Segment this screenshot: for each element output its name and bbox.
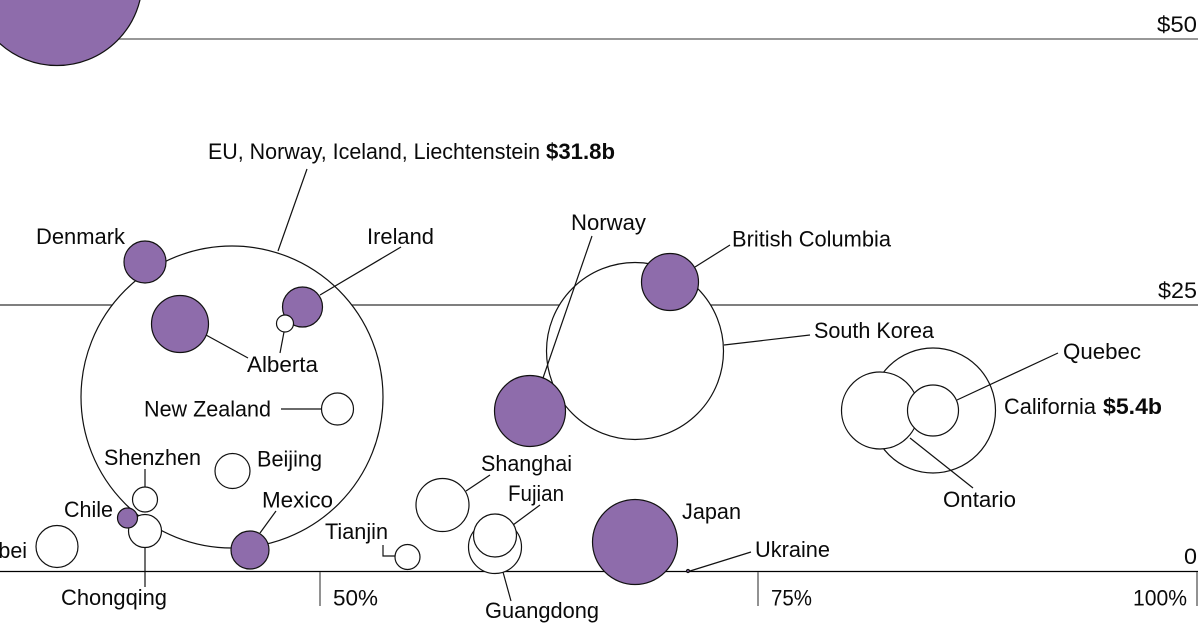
bubble: EU, Norway, Iceland, Liechtenstein	[81, 139, 615, 548]
bubble: Tianjin: Tianjin	[325, 519, 388, 544]
bubble: Tianjin	[325, 519, 420, 570]
bubble: British Columbia	[642, 226, 892, 310]
bubble: Ontario: Ontario	[943, 487, 1016, 512]
bubble: California	[870, 348, 1162, 473]
bubble: Chongqing	[61, 514, 167, 610]
bubble: California: $5.4b	[1103, 394, 1162, 419]
bubble: Mexico: Mexico	[262, 488, 333, 512]
bubble: large unlabeled purple	[0, 0, 142, 66]
bubble: Beijing	[215, 446, 322, 488]
bubble: Shenzhen	[104, 445, 201, 512]
bubble: Ireland	[282, 224, 434, 327]
bubble: Shanghai: Shanghai	[481, 451, 572, 476]
bubble: EU, Norway, Iceland, Liechtenstein: $31.8b	[546, 139, 615, 164]
bubble: Hubei	[0, 526, 78, 568]
bubble: Quebec	[908, 339, 1141, 436]
bubble: Chile	[64, 497, 138, 528]
bubble: Quebec: Quebec	[1063, 339, 1141, 364]
bubble: Chile: Chile	[64, 497, 113, 522]
bubble: Ukraine	[686, 537, 830, 572]
y axis label: $25: $25	[1158, 278, 1197, 303]
bubble: British Columbia: British Columbia	[732, 226, 892, 252]
bubble: Japan: Japan	[682, 499, 741, 524]
x axis tick: 75%	[758, 572, 812, 610]
x axis tick: 50%: 50%	[333, 586, 378, 610]
bubble: California: California	[1004, 394, 1097, 419]
bubble: Fujian	[474, 481, 564, 557]
bubble: Ukraine: Ukraine	[755, 537, 830, 562]
bubble: Denmark	[36, 224, 166, 283]
bubble: New Zealand: New Zealand	[144, 396, 271, 422]
bubble: Shanghai	[416, 451, 572, 532]
bubble: Beijing: Beijing	[257, 446, 322, 472]
bubble: Ontario	[842, 372, 1016, 512]
bubble: unlabeled purple with leader	[152, 296, 248, 358]
bubble: Alberta	[247, 315, 319, 377]
bubble: Japan	[592, 499, 741, 584]
bubble: Norway: Norway	[571, 210, 646, 235]
bubble: Guangdong	[468, 520, 599, 623]
bubble: Mexico	[231, 488, 333, 569]
y axis label: 0: 0	[1184, 544, 1197, 569]
bubble: Fujian: Fujian	[508, 481, 564, 506]
x axis tick: 50%	[320, 572, 378, 610]
bubble: EU, Norway, Iceland, Liechtenstein: EU, Norway, Iceland, Liechtenstein	[208, 139, 540, 164]
x axis tick: 75%: 75%	[771, 586, 812, 610]
bubble: Shenzhen: Shenzhen	[104, 445, 201, 470]
bubble: Alberta: Alberta	[247, 352, 319, 377]
bubble: Chongqing: Chongqing	[61, 585, 167, 610]
bubble: Ireland: Ireland	[367, 224, 434, 249]
bubble: Denmark: Denmark	[36, 224, 126, 249]
x axis tick: 100%: 100%	[1133, 586, 1187, 610]
bubble: Guangdong: Guangdong	[485, 598, 599, 623]
bubble: Norway	[494, 210, 646, 446]
x axis tick: 100%	[1133, 572, 1197, 610]
y axis label: $50: $50	[1157, 12, 1197, 37]
bubble: South Korea	[546, 262, 935, 440]
bubble: South Korea: South Korea	[814, 318, 935, 343]
bubble: New Zealand	[144, 393, 354, 425]
